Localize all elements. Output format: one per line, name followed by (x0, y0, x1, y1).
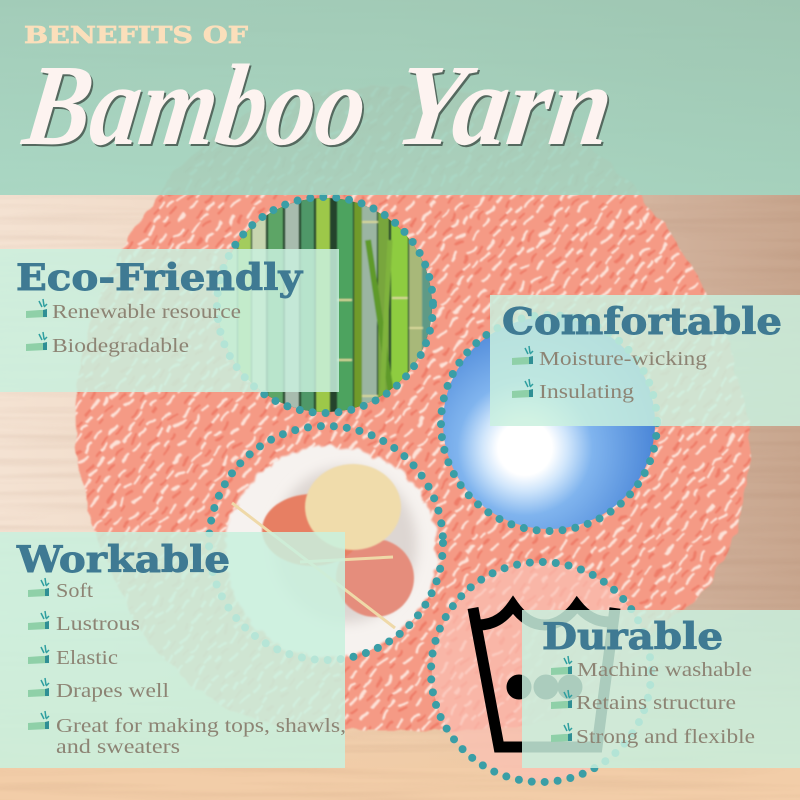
bullet: moisture-wicking: Moisture-wicking (539, 348, 707, 370)
bullet: moisture-wicking (512, 346, 707, 370)
heading: comfortable: Comfortable (502, 301, 782, 343)
bullet: machine washable: Machine washable (577, 659, 752, 681)
bullet: strong and flexible (551, 723, 755, 748)
bullet: soft (28, 578, 93, 602)
bullet: great for making tops, shawls, and sweaters (28, 711, 346, 758)
bullet: great for making tops, shawls, and sweaters: and sweaters (56, 736, 180, 758)
title: bamboo yarn (15, 42, 623, 172)
bullet: lustrous (28, 611, 140, 635)
title: bamboo yarn: Bamboo (15, 42, 375, 170)
bullet: elastic: Elastic (56, 647, 118, 669)
title: bamboo yarn: Bamboo (17, 44, 377, 172)
photo circle: wash symbol (432, 563, 650, 781)
panel: eco-friendly (0, 249, 339, 392)
photo circle: bamboo (217, 195, 435, 415)
bullet: retains structure: Retains structure (576, 692, 736, 714)
heading: durable: Durable (542, 616, 723, 658)
photo circle: knitting basket (225, 446, 437, 658)
photo circle: sky and sun (443, 317, 655, 529)
panel: comfortable (490, 295, 800, 426)
yarn ball (75, 86, 750, 731)
heading: workable: Workable (16, 539, 230, 581)
header band (0, 0, 800, 195)
bullet: great for making tops, shawls, and sweaters: Great for making tops, shawls, (56, 715, 346, 737)
subtitle: benefits of: BENEFITS OF (24, 22, 249, 49)
dotted circle borders (209, 197, 657, 782)
bullet: biodegradable (26, 332, 189, 357)
bullet: lustrous: Lustrous (56, 613, 140, 635)
bullet: renewable resource (26, 299, 241, 323)
heading: eco-friendly: Eco-Friendly (16, 257, 303, 299)
panel: workable (0, 532, 346, 768)
title: bamboo yarn: Yarn (389, 42, 621, 170)
bullet: machine washable (551, 656, 752, 681)
bullet: soft: Soft (56, 580, 93, 602)
bullet: drapes well (28, 678, 170, 702)
bullet: insulating: Insulating (539, 381, 634, 403)
bullet: elastic (28, 645, 118, 669)
icon: machine wash symbol (473, 605, 615, 747)
bullet: insulating (512, 379, 634, 403)
panel: durable (522, 610, 800, 768)
title: bamboo yarn: Yarn (391, 44, 623, 172)
bullet: retains structure (551, 690, 736, 714)
bullet: drapes well: Drapes well (56, 680, 170, 702)
bullet: strong and flexible: Strong and flexible (576, 726, 755, 748)
bullet: renewable resource: Renewable resource (52, 301, 241, 323)
bullet: biodegradable: Biodegradable (52, 335, 189, 357)
